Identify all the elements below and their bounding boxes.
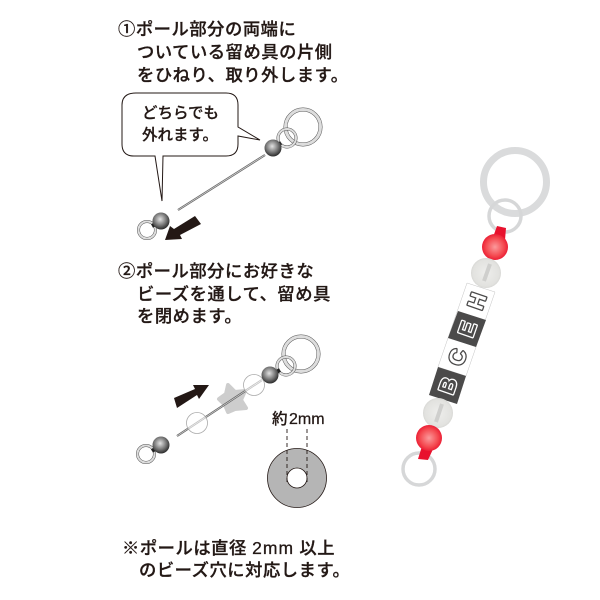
step 2 text: ビーズを通して、留め具 [137,284,331,304]
note text [122,538,350,580]
bead hole diagram: 約 [272,410,288,428]
step 2 text: を閉めます。 [137,306,242,326]
bead hole diagram: 2mm [289,411,325,428]
step 1 text: ついている留め具の片側 [137,42,333,62]
removed stopper [138,212,170,238]
bottom small ring [403,453,435,485]
top ring [484,150,546,214]
bottom pearl bead [423,398,453,428]
arrow: down-left [165,216,201,240]
letter cubes [429,283,495,404]
step 1 text: ①ポール部分の両端に [118,19,296,39]
top pearl bead [471,258,501,288]
top red bead [482,226,508,260]
speech bubble: どちらでも [142,104,219,122]
speech bubble [122,93,260,201]
letter cubes: H [463,290,491,313]
note text: ※ポールは直径 2mm 以上 [122,538,335,558]
lower stopper [138,436,170,462]
top small ring [489,200,521,232]
bottom red bead [416,425,442,460]
keychain pole, upper part [178,110,320,210]
bead hole diagram [268,410,326,508]
star and clear beads on pole [177,336,318,436]
letter cubes: B [434,374,462,397]
arrow: up-right [174,385,209,408]
step 2 text [118,261,331,326]
finished keychain [403,150,546,485]
letter cubes: E [453,318,482,340]
step 1 text [118,19,349,85]
note text: のビーズ穴に対応します。 [139,560,350,580]
step 1 text: をひねり、取り外します。 [137,65,349,85]
speech bubble: 外れます。 [142,126,218,144]
step 2 text: ②ポール部分にお好きな [118,261,314,281]
letter cubes: C [443,345,472,369]
